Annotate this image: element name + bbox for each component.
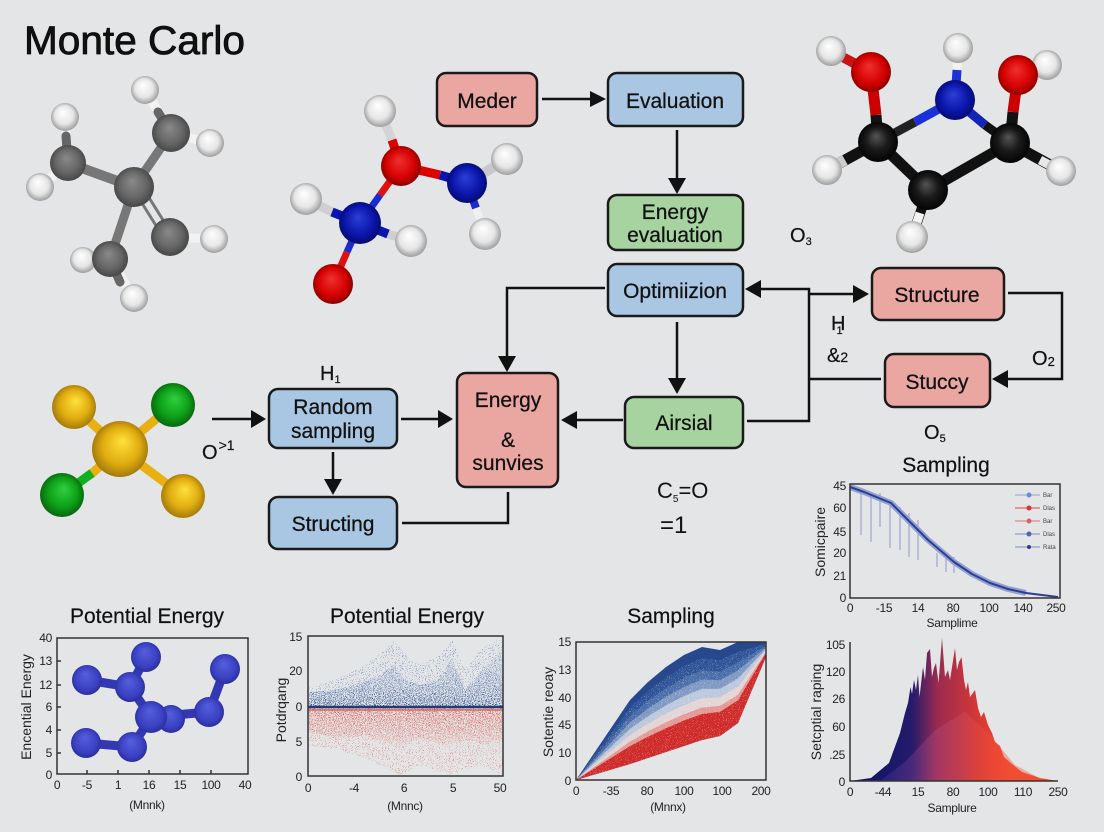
x tick labels: 200: [751, 784, 771, 798]
label: C5=O: C: [657, 478, 673, 503]
x tick labels: -15: [876, 601, 893, 615]
y axis label: Potdrqang: [273, 678, 289, 742]
x tick labels: 0: [54, 778, 61, 792]
legend: Dlas: [1043, 532, 1055, 538]
dense red scatter: [308, 708, 503, 748]
x axis label: (Mnnk): [129, 798, 165, 812]
x axis label: (Mnnx): [650, 800, 686, 814]
fan of blue to red curves: [576, 642, 766, 780]
sparse blue scatter: [308, 640, 503, 707]
x tick labels: 80: [641, 784, 654, 798]
blue molecule: [71, 642, 240, 762]
x tick labels: 250: [1046, 601, 1066, 615]
box: Airsial: [625, 397, 743, 448]
y tick labels: [833, 479, 847, 605]
connector: Structing to Energy: [402, 492, 508, 523]
box: Structing: [269, 497, 397, 549]
box: Evaluation: Evaluation: [626, 90, 724, 113]
label: H1: 1: [334, 374, 341, 386]
box: Random sampling: sampling: [291, 420, 375, 443]
box: Optimization: Optimiizion: [623, 280, 727, 303]
legend: [1015, 492, 1056, 551]
y tick labels: 0: [46, 768, 53, 782]
box: Structing: Structing: [292, 513, 374, 536]
plot frame: [576, 642, 766, 780]
y tick labels: 6: [46, 700, 53, 714]
box: Energy evaluation: Energy: [642, 201, 709, 224]
x axis label: Samplime: [927, 616, 978, 630]
arrow: input to Random sampling: [212, 410, 266, 428]
box: Meder: Meder: [457, 90, 517, 113]
y tick labels: 20: [289, 664, 303, 678]
x tick labels: -4: [349, 781, 360, 795]
x tick labels: 80: [947, 601, 960, 615]
x tick labels: 100: [712, 784, 732, 798]
legend: Bar: [1043, 493, 1052, 499]
chart: Potential Energy molecule: [18, 605, 252, 812]
chart title: Sampling: [902, 454, 990, 477]
x tick labels: 0: [305, 781, 312, 795]
y tick labels: 12: [39, 678, 53, 692]
y tick labels: 5: [296, 735, 303, 749]
legend: Rata: [1043, 545, 1056, 551]
y tick labels: 21: [833, 569, 847, 583]
label: C5=O: 5: [673, 494, 679, 505]
box: Energy evaluation: evaluation: [627, 224, 723, 247]
dense blue scatter: [308, 650, 503, 707]
chart: Potential Energy scatter: [273, 605, 507, 813]
y tick labels: 20: [833, 546, 847, 560]
y tick labels: 40: [39, 631, 53, 645]
label: O2: O: [1032, 348, 1048, 370]
y tick labels: 15: [558, 635, 572, 649]
x tick labels: [54, 778, 252, 792]
chart: Sampling histogram: [808, 638, 1068, 815]
inner hill: [880, 712, 1045, 781]
arrow: Optimization to Energy: [498, 288, 605, 372]
box: Structure: [872, 268, 1004, 320]
x tick labels: 15: [912, 785, 925, 799]
arrow: Evaluation to Energy evaluation: [668, 130, 686, 194]
arrow: Random sampling to Structing: [324, 452, 342, 495]
x tick labels: -35: [603, 784, 620, 798]
x tick labels: 140: [1013, 601, 1033, 615]
box: Energy and surveys: sunvies: [472, 452, 544, 475]
y axis label: Encential Energy: [18, 654, 34, 760]
x tick labels: 100: [978, 785, 998, 799]
x tick labels: 50: [494, 781, 507, 795]
axes: [850, 642, 1058, 781]
box: Energy evaluation: [608, 195, 743, 250]
y axis label: Sotentie reoay: [540, 667, 556, 757]
chart: Sampling fan: [540, 605, 771, 814]
x tick labels: 5: [450, 781, 457, 795]
y axis label: Setcptial raping: [808, 664, 824, 760]
y tick labels: 10: [558, 746, 572, 760]
y tick labels: [39, 631, 53, 782]
chart: Sampling decay: [812, 454, 1066, 630]
box: Stuccy: Stuccy: [905, 371, 969, 394]
x axis label: (Mnnc): [387, 799, 423, 813]
box: Stuccy: [885, 354, 990, 407]
decay curve: [850, 487, 1058, 597]
label: C5=O: =O: [678, 478, 708, 503]
molecule: yellow and green: [40, 383, 205, 518]
box: Random sampling: Random: [293, 396, 373, 419]
x tick labels: [573, 784, 771, 798]
error bars: [861, 493, 954, 573]
box: Evaluation: [608, 73, 743, 126]
y tick labels: 15: [289, 630, 303, 644]
y tick labels: 13: [39, 654, 53, 668]
arrow: Structure to Stuccy: [992, 293, 1062, 388]
y tick labels: 60: [832, 720, 846, 734]
label: O>1: >1: [219, 437, 235, 453]
arrow: Airsial to Energy: [561, 411, 623, 429]
label: H: H: [831, 313, 845, 335]
molecule: gray carbon: [26, 76, 228, 312]
label: H: 1: [836, 325, 843, 337]
box: Optimization: [608, 264, 743, 316]
x tick labels: 15: [174, 778, 187, 792]
x tick labels: 16: [143, 778, 156, 792]
box: Structure: Structure: [894, 284, 980, 307]
box: Meder: [437, 73, 537, 126]
x tick labels: -5: [82, 778, 93, 792]
connector: Stuccy to junction: [809, 378, 881, 380]
sparse red scatter: [308, 707, 503, 775]
y tick labels: 0: [565, 774, 572, 788]
y tick labels: 45: [558, 718, 572, 732]
x tick labels: 6: [401, 781, 408, 795]
box: Random sampling: [269, 389, 397, 448]
x tick labels: 1: [115, 778, 122, 792]
box: Energy and surveys: Energy: [475, 389, 542, 412]
spiky area: [850, 638, 1058, 781]
label: &2: &2: [827, 345, 848, 367]
x tick labels: 80: [947, 785, 960, 799]
x tick labels: [847, 601, 1066, 615]
legend: Dlas: [1043, 506, 1055, 512]
label: O3: O: [790, 225, 806, 247]
plot frame: [850, 484, 1060, 598]
y tick labels: [558, 635, 572, 788]
x tick labels: [847, 785, 1068, 799]
y tick labels: 0: [839, 775, 846, 789]
y tick labels: 45: [833, 525, 847, 539]
arrow: Meder to Evaluation: [542, 91, 606, 107]
x tick labels: [305, 781, 507, 795]
x tick labels: 100: [979, 601, 999, 615]
axis ticks: [57, 661, 211, 774]
y tick labels: 60: [833, 501, 847, 515]
y tick labels: 4: [46, 723, 53, 737]
molecule: black, blue and red ring: [812, 33, 1076, 253]
box: Airsial: Airsial: [655, 412, 713, 435]
x axis label: Samplure: [928, 801, 977, 815]
y tick labels: 0: [296, 770, 303, 784]
label: O5: 5: [940, 433, 946, 445]
x tick labels: 0: [847, 785, 854, 799]
legend: Bar: [1043, 519, 1052, 525]
y tick labels: .25: [829, 748, 846, 762]
y tick labels: [826, 638, 846, 789]
plot frame: [57, 638, 248, 774]
label: O3: 3: [806, 236, 812, 248]
x tick labels: 40: [239, 778, 252, 792]
label: O>1: O: [202, 442, 218, 464]
zero line: [308, 706, 503, 708]
label: H1: H: [320, 363, 334, 385]
y tick labels: 120: [826, 665, 846, 679]
x tick labels: 0: [847, 601, 854, 615]
arrow: Airsial to Optimization: [745, 280, 809, 421]
y tick labels: 5: [46, 746, 53, 760]
y tick labels: 0: [296, 700, 303, 714]
label: O5: O: [924, 422, 940, 444]
x tick labels: -44: [875, 785, 892, 799]
chart title: Sampling: [627, 605, 715, 628]
label: =1: =1: [660, 512, 687, 539]
y tick labels: [289, 630, 303, 784]
plot frame: [308, 636, 503, 776]
box: Energy and surveys: &: [501, 429, 515, 452]
y axis label: Somicpaire: [812, 507, 828, 577]
arrow: junction to Structure: [809, 285, 869, 303]
x tick labels: 100: [674, 784, 694, 798]
decay curve band: [850, 487, 1026, 593]
y tick labels: 0: [840, 591, 847, 605]
box: Energy and surveys: [457, 373, 558, 487]
y tick labels: 13: [558, 663, 572, 677]
arrow: Random sampling to Energy: [401, 410, 453, 428]
y tick labels: 105: [826, 638, 846, 652]
x tick labels: 110: [1014, 785, 1033, 799]
y tick labels: 45: [833, 479, 847, 493]
molecule: red and blue: [290, 95, 523, 304]
x tick labels: 14: [912, 601, 925, 615]
x tick labels: 250: [1048, 785, 1068, 799]
x tick labels: 0: [573, 784, 580, 798]
label: O2: 2: [1048, 354, 1055, 369]
chart title: Potential Energy: [70, 605, 225, 628]
y tick labels: 40: [558, 691, 572, 705]
x tick labels: 100: [201, 778, 221, 792]
y tick labels: 26: [832, 692, 846, 706]
title: Monte Carlo: [24, 19, 245, 63]
chart title: Potential Energy: [330, 605, 485, 628]
arrow: Optimization to Airsial: [668, 322, 686, 394]
